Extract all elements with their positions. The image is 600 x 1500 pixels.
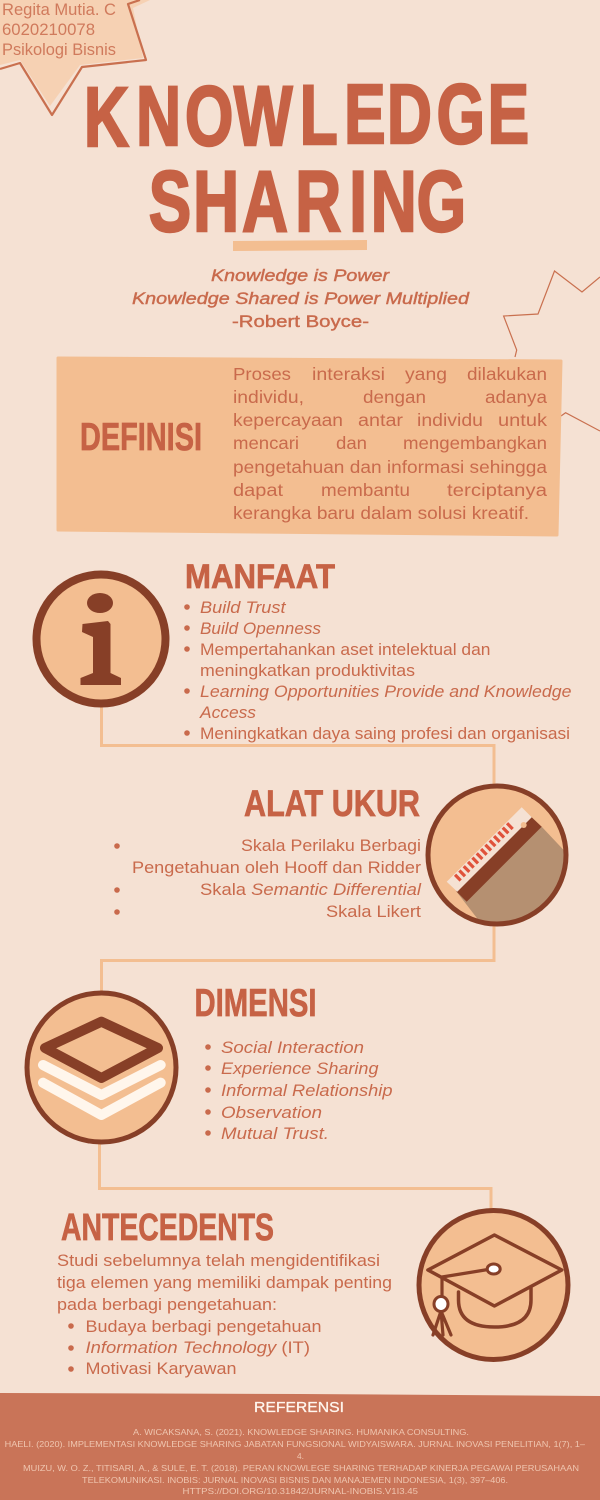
- heading: dimensi: DIMENSI: [194, 982, 316, 1025]
- title: KNOWLEDGE: [84, 67, 529, 164]
- definition text: kepercayaan: [233, 410, 343, 430]
- list: manfaat: [184, 599, 571, 743]
- quote: -Robert Boyce-: [232, 313, 369, 331]
- panel: definisi: [58, 358, 561, 535]
- title underline: [233, 240, 367, 251]
- definition text: kerangka baru dalam solusi kreatif.: [233, 503, 529, 523]
- heading: definisi: DEFINISI: [80, 416, 202, 459]
- list: alat ukur: Pengetahuan oleh Hooff dan Ridder: [132, 859, 422, 877]
- list: dimensi: Observation: [221, 1104, 322, 1122]
- text: antecedents: Studi sebelumnya telah mengidentifikasi: [57, 1252, 380, 1270]
- list: manfaat: Build Openness: [200, 620, 321, 638]
- reference list: [5, 1428, 585, 1496]
- definition text: individu,: [233, 387, 304, 407]
- text: antecedents: pada berbagi pengetahuan:: [57, 1296, 277, 1314]
- list: alat ukur: Skala Perilaku Berbagi: [241, 837, 421, 855]
- list: alat ukur: Skala Likert: [326, 903, 421, 921]
- list: dimensi: [205, 1039, 392, 1143]
- definition text: dan: [336, 433, 367, 453]
- heading: alat ukur: ALAT UKUR: [244, 783, 420, 824]
- definition text: antar: [358, 410, 403, 430]
- title: [84, 67, 529, 251]
- definition text: untuk: [498, 410, 547, 430]
- list: manfaat: Learning Opportunities Provide and Knowledge: [200, 683, 572, 701]
- definition text: dapat: [233, 480, 283, 500]
- decorative star: top left with author details: [0, 0, 150, 115]
- definition text: mencari: [233, 433, 299, 453]
- list: manfaat: meningkatkan produktivitas: [200, 662, 415, 680]
- list: dimensi: Mutual Trust.: [221, 1125, 329, 1143]
- icon: ruler: [428, 786, 575, 940]
- quote: Knowledge Shared is Power Multiplied: [132, 290, 470, 308]
- icon: layers: [27, 993, 176, 1142]
- list: dimensi: Experience Sharing: [221, 1060, 379, 1078]
- definition text: terciptanya: [447, 480, 547, 500]
- definition text: Proses: [233, 364, 291, 384]
- icon: graduation cap: [419, 1210, 568, 1360]
- author study program: Psikologi Bisnis: [2, 41, 116, 59]
- list: manfaat: Mempertahankan aset intelektual dan: [200, 641, 490, 659]
- reference list: HAELI. (2020). IMPLEMENTASI KNOWLEDGE SHARING JABATAN FUNGSIONAL WIDYAISWARA. JURNAL INOVASI PENELITIAN, 1(7), 1–: [5, 1440, 585, 1449]
- list: manfaat: Meningkatkan daya saing profesi dan organisasi: [200, 725, 570, 743]
- definition text: yang: [405, 364, 447, 384]
- quote: Knowledge is Power: [211, 267, 391, 285]
- definition text: dilakukan: [467, 364, 547, 384]
- title: SHARING: [149, 155, 466, 250]
- list: alat ukur: [114, 837, 422, 921]
- reference list: HTTPS://DOI.ORG/10.31842/JURNAL-INOBIS.V1I3.45: [182, 1487, 419, 1496]
- reference list: TELEKOMUNIKASI. INOBIS: JURNAL INOVASI BISNIS DAN MANAJEMEN INDONESIA, 1(3), 397–406.: [82, 1476, 508, 1485]
- author id: 6020210078: [2, 21, 95, 39]
- list: dimensi: Social Interaction: [221, 1039, 364, 1057]
- definition text: interaksi: [312, 364, 385, 384]
- list: dimensi: Informal Relationship: [221, 1082, 392, 1100]
- list: alat ukur: Skala Semantic Differential: [200, 881, 422, 899]
- text: antecedents: Information Technology (IT): [86, 1339, 310, 1357]
- definition text: pengetahuan dan informasi sehingga: [233, 457, 547, 477]
- heading: referensi: REFERENSI: [254, 1399, 344, 1416]
- definition text: mengembangkan: [403, 433, 547, 453]
- text: antecedents: [57, 1252, 392, 1378]
- definition text: dengan: [363, 387, 426, 407]
- decorative star outline: right side: [504, 271, 600, 431]
- reference list: 4.: [297, 1452, 304, 1461]
- reference list: MUIZU, W. O. Z., TITISARI, A., & SULE, E. T. (2018). PERAN KNOWLEGE SHARING TERHADAP KINERJA PEGAWAI PERUSAHAAN: [23, 1464, 579, 1473]
- list: manfaat: Build Trust: [200, 599, 287, 617]
- text: antecedents: Budaya berbagi pengetahuan: [86, 1318, 322, 1336]
- text: antecedents: Motivasi Karyawan: [86, 1360, 236, 1378]
- reference list: A. WICAKSANA, S. (2021). KNOWLEDGE SHARING. HUMANIKA CONSULTING.: [133, 1428, 469, 1437]
- author name: Regita Mutia. C: [2, 1, 116, 19]
- heading: antecedents: ANTECEDENTS: [61, 1207, 274, 1249]
- definition text: adanya: [485, 387, 547, 407]
- definition text: membantu: [321, 480, 410, 500]
- icon: information: [36, 574, 166, 704]
- definition text: individu: [417, 410, 483, 430]
- list: manfaat: Access: [199, 704, 256, 722]
- panel: referensi: [0, 1393, 600, 1500]
- connector lines between sections: [100, 700, 494, 1215]
- definition text: [233, 364, 547, 523]
- quote: [132, 267, 470, 331]
- text: antecedents: tiga elemen yang memiliki dampak penting: [57, 1274, 392, 1292]
- heading: manfaat: MANFAAT: [185, 558, 335, 596]
